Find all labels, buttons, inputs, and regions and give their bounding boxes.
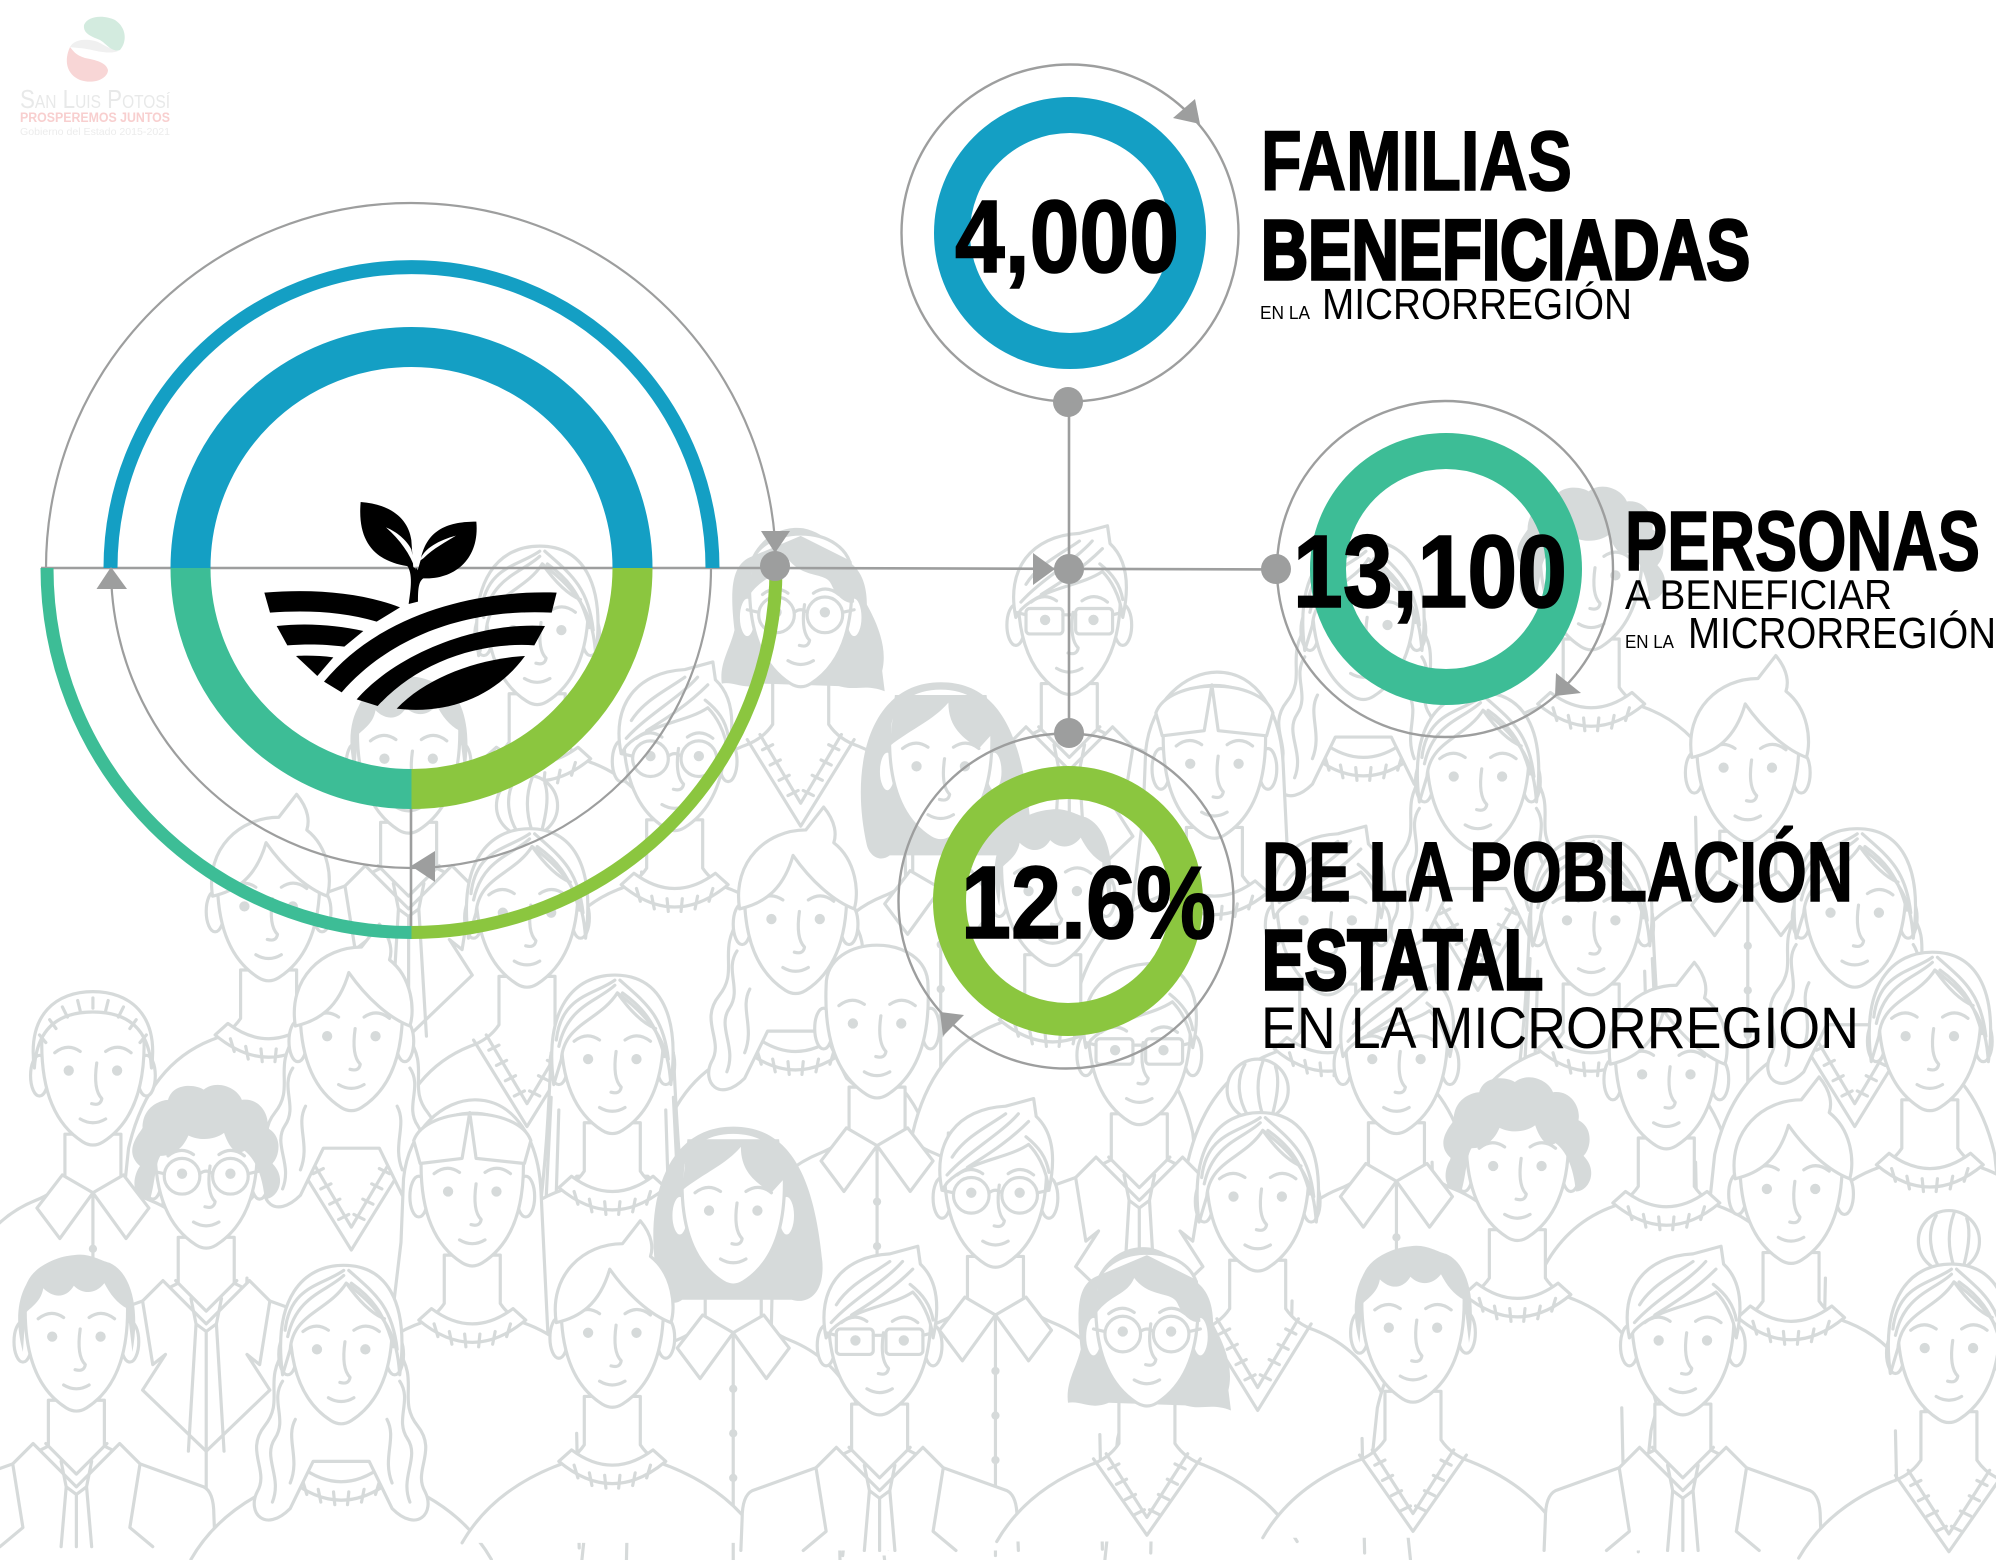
node: centre junction [1054, 554, 1084, 584]
label: microrregión: MICRORREGIÓN [1322, 280, 1632, 329]
thin gray arc top [46, 203, 776, 568]
ring: outline [1277, 401, 1613, 737]
ring: green [950, 782, 1186, 1020]
ring: outline [898, 734, 1234, 1068]
icon: plant and fields [264, 502, 557, 710]
person: bun woman under rings [374, 775, 680, 1276]
label: en la: EN LA [1260, 303, 1310, 323]
node: bottom circle [1054, 718, 1084, 748]
node: right circle [1261, 554, 1291, 584]
person: man with sweep fringe [462, 1221, 763, 1543]
person: woman with bangs centre [1062, 672, 1367, 1127]
ring: blue [952, 115, 1188, 351]
node: top circle [1053, 387, 1083, 417]
green outer arc [412, 568, 776, 932]
arrow: centre junction [1033, 553, 1055, 585]
teal thick arc [190, 568, 412, 789]
blue outer arc [110, 267, 712, 568]
person: wavy hair woman [1325, 692, 1631, 1139]
number: 12.6%: 12.6% [961, 845, 1216, 960]
heading: beneficiadas: BENEFICIADAS [1261, 203, 1750, 297]
person: crew cut man [0, 992, 246, 1433]
person: man with square glasses bottom [741, 1246, 1018, 1550]
person: dark hair man in ring three [900, 809, 1205, 1254]
person: suit man with dark hair [0, 1255, 215, 1547]
person: woman far right [1702, 829, 1996, 1276]
person: dark curled hair woman with glasses [997, 1247, 1297, 1542]
person: woman with wide collar [1777, 952, 1996, 1399]
label: en la: EN LA [1625, 632, 1674, 652]
heading: familias: FAMILIAS [1261, 114, 1572, 208]
person: bun woman bottom right [1799, 1211, 1996, 1558]
arrow: left up [96, 567, 127, 589]
number: 13,100: 13,100 [1293, 514, 1567, 629]
blue thick arc [190, 347, 632, 568]
teal outer arc [47, 568, 412, 932]
people background illustration [0, 487, 1996, 1560]
logo: San Luis Potosí: PROSPEREMOS JUNTOS [20, 110, 170, 125]
arrow: ring three [940, 1012, 964, 1036]
arrow: ring one [1173, 99, 1200, 124]
person: woman with curled hair [643, 807, 948, 1282]
heading: estatal: ESTATAL [1262, 913, 1543, 1007]
stat: 13,100 personas [1277, 401, 1996, 737]
main ring group [46, 203, 776, 932]
person: man behind text [1175, 826, 1480, 1283]
node: left junction [760, 551, 790, 581]
person: button shirt man [724, 945, 1030, 1386]
person: bun woman centre [1105, 1059, 1410, 1559]
person: dark hair man under icon [266, 677, 551, 1121]
person: crew neck man [1514, 962, 1819, 1437]
person: long wavy woman [191, 1265, 491, 1559]
person: long straight hair woman [460, 975, 765, 1422]
person: dark bob woman [580, 1127, 886, 1560]
label: en la microrregion: EN LA MICRORREGION [1261, 996, 1859, 1061]
stat: 12.6% población [898, 734, 1859, 1068]
person: man right [1595, 656, 1901, 1130]
person: woman with dark hair and glasses [648, 528, 953, 975]
person: glasses man [997, 956, 1282, 1413]
person: woman behind icon [384, 546, 690, 993]
person: round collar woman [1244, 965, 1549, 1422]
logo: San Luis Potosí: Gobierno del Estado 2015-2021 [20, 126, 170, 138]
label: a beneficiar: A BENEFICIAR [1625, 571, 1892, 618]
number: 4,000: 4,000 [955, 179, 1179, 294]
person: wavy woman V neck [199, 924, 504, 1399]
logo: San Luis Potosí: San Luis Potosí [20, 84, 170, 114]
thin gray arc bottom [111, 568, 711, 868]
connector lines [41, 402, 1276, 932]
ring: teal [1328, 451, 1564, 687]
arrow: bottom left [411, 851, 435, 882]
person: suit man bottom [1544, 1246, 1822, 1550]
person: bangs woman [320, 1100, 625, 1554]
logo: San Luis Potosí [20, 17, 170, 138]
stat: 4,000 familias [902, 64, 1750, 402]
person: man with square glasses [927, 526, 1212, 983]
person: curly hair man upper right [1438, 487, 1744, 938]
person: woman behind heading [1438, 836, 1744, 1283]
person: swoop hair man [1638, 1077, 1944, 1552]
green thick arc [412, 568, 632, 789]
arrow: top right down [761, 531, 790, 553]
arrow: ring two [1555, 673, 1581, 696]
person: dark hair man bottom [1263, 1246, 1563, 1538]
person: woman with round glasses [522, 662, 827, 1119]
person: glasses man with sweep hair [843, 1099, 1148, 1556]
person: woman inside ring two [1211, 541, 1516, 988]
person: curly hair glasses [64, 1085, 349, 1536]
arrowheads and nodes [96, 387, 1291, 882]
ring: outline [902, 64, 1238, 402]
person: man lower left of rings [116, 794, 421, 1269]
person: curly hair [1365, 1077, 1670, 1529]
person: dark bob woman centre [788, 682, 1093, 1129]
